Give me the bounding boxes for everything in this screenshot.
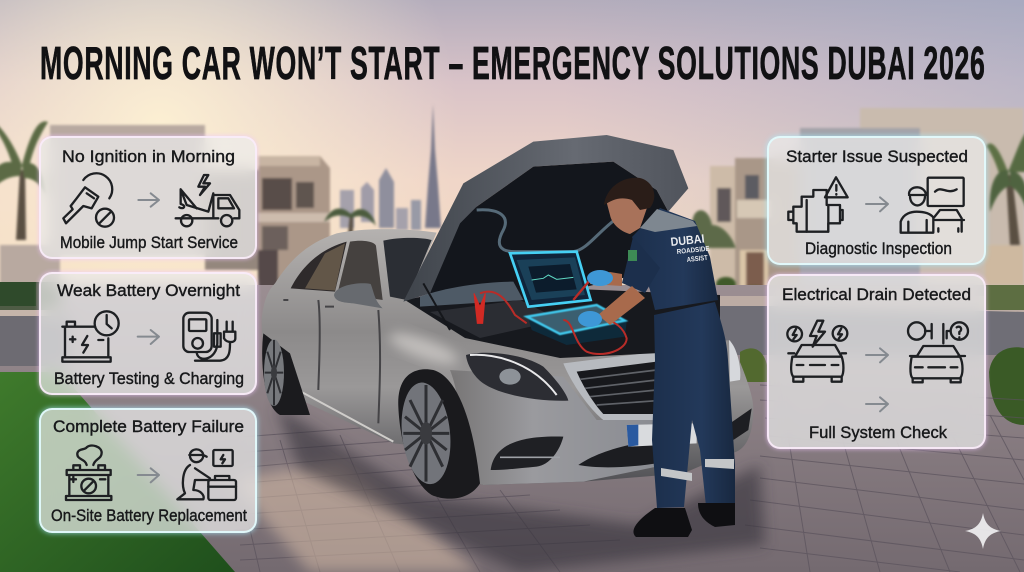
skyline with Burj Khalifa xyxy=(340,104,441,230)
icon: starter motor with warning xyxy=(788,177,848,232)
flag patch xyxy=(628,250,637,261)
car body xyxy=(262,229,753,485)
panel: No Ignition in Morning xyxy=(39,136,257,259)
diagnostic tablet xyxy=(510,252,627,345)
arrow xyxy=(138,468,159,482)
arrow xyxy=(138,330,159,344)
panel: Electrical Drain Detected xyxy=(767,274,986,449)
jumper cables xyxy=(474,280,627,354)
gloves xyxy=(578,311,602,327)
icon: battery tester and plug xyxy=(183,313,235,361)
light streak on paving xyxy=(230,460,480,572)
front wheel xyxy=(397,369,480,499)
icons: battery, clock, arrow, tester xyxy=(62,311,235,362)
head xyxy=(606,191,648,234)
car shadow xyxy=(275,405,765,572)
icons: starter motor, arrow, technician with car xyxy=(788,177,964,233)
panel: Complete Battery Failure xyxy=(39,408,257,533)
arrow xyxy=(866,197,888,211)
door seams and handles xyxy=(283,300,380,423)
grille xyxy=(563,352,657,420)
headlight xyxy=(466,353,568,401)
icon: battery with clock xyxy=(62,311,119,362)
right buildings xyxy=(710,108,1024,298)
heading: problem 2: Weak Battery Overnight xyxy=(57,281,240,300)
heading: problem 3: Complete Battery Failure xyxy=(53,417,244,436)
shoulder yoke xyxy=(640,209,697,232)
engine bay xyxy=(405,285,720,358)
left buildings xyxy=(0,125,330,290)
footer: solution 2: Battery Testing & Charging xyxy=(54,369,244,388)
side windows xyxy=(291,238,432,300)
sleeve xyxy=(622,237,660,293)
road and paving xyxy=(0,282,1024,572)
icon: tow truck with lightning xyxy=(176,175,239,226)
silver sedan xyxy=(262,229,753,499)
icons: draining car, arrows, car system check xyxy=(787,321,968,411)
icons: key, arrow, tow truck xyxy=(63,173,239,227)
uniform lettering: ROADSIDE xyxy=(676,246,710,256)
boots xyxy=(633,503,735,537)
legs and trousers xyxy=(652,302,735,508)
fender highlight xyxy=(385,326,461,370)
heading: problem 1: No Ignition in Morning xyxy=(62,147,235,166)
icon: car with system check circuit xyxy=(908,322,968,382)
footer: solution 1: Mobile Jump Start Service xyxy=(60,233,238,252)
uniform lettering xyxy=(670,232,710,264)
footer: solution 4: Diagnostic Inspection xyxy=(805,239,952,258)
heading: problem 5: Electrical Drain Detected xyxy=(782,285,971,304)
lawn xyxy=(0,372,235,572)
lower intake and bumper xyxy=(491,437,563,470)
icon: technician with toolbox and battery xyxy=(177,449,236,500)
left palm and street palm xyxy=(0,118,376,240)
sky xyxy=(0,0,1024,330)
icon: smoking dead battery xyxy=(66,446,111,500)
mirror xyxy=(334,283,383,308)
panel: Starter Issue Suspected xyxy=(767,136,986,265)
arrows xyxy=(866,348,888,411)
uniform lettering: DUBAI xyxy=(670,232,705,249)
number plate xyxy=(627,423,697,447)
icon: car with lightning bolts xyxy=(787,321,847,382)
forearm xyxy=(598,286,645,325)
panel: Weak Battery Overnight xyxy=(39,272,257,395)
raised hood xyxy=(403,135,688,330)
uniform lettering: ASSIST xyxy=(686,255,709,264)
icon: sparkle watermark xyxy=(965,513,1001,549)
torso xyxy=(632,208,718,310)
icon: key with prohibition sign xyxy=(63,173,114,227)
title: MORNING CAR WON’T START – EMERGENCY SOLUTIONS DUBAI 2026 xyxy=(40,37,985,89)
reflective strips xyxy=(661,459,734,481)
footer: solution 3: On-Site Battery Replacement xyxy=(51,506,247,525)
rear wheel xyxy=(262,333,310,415)
heading: problem 4: Starter Issue Suspected xyxy=(786,147,968,166)
paving stones xyxy=(200,385,1024,572)
right palm and shrubs xyxy=(686,130,1024,298)
icons: dead battery, arrow, technician xyxy=(66,446,236,500)
front quarter panel xyxy=(450,370,657,485)
arrow xyxy=(138,193,159,207)
footer: solution 5: Full System Check xyxy=(809,423,947,442)
mechanic in navy coverall xyxy=(578,178,735,537)
icon: technician, monitor and car xyxy=(901,178,964,233)
